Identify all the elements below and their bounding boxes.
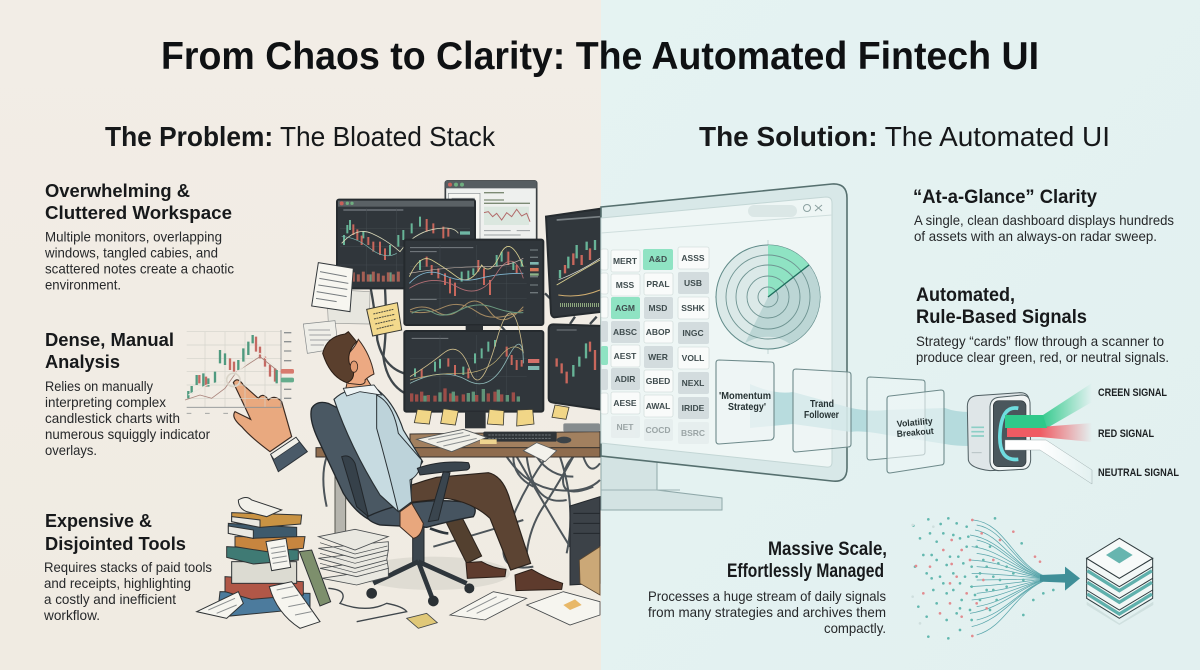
keyboard, mouse and desk papers	[417, 423, 600, 462]
monitor: centre chart with indicators	[404, 240, 543, 331]
ticker tile grid: MERT	[613, 256, 638, 266]
strategy card: trend follower: Trand	[810, 399, 834, 410]
browser window behind monitors	[445, 181, 537, 241]
ticker tile grid: GBED	[646, 376, 670, 386]
monitor stand	[601, 450, 722, 510]
ticker tile grid: BSRC	[681, 428, 705, 438]
text block: at-a-glance clarity	[913, 186, 1174, 244]
strategy card: back	[867, 377, 925, 460]
text block: rule-based signals	[916, 285, 1169, 365]
text block: rule-based signals: Automated,	[916, 285, 1015, 306]
text block: dense manual analysis: Dense, Manual	[45, 329, 174, 350]
floor shadow	[357, 557, 510, 590]
computer tower and box	[570, 497, 600, 595]
panel background: solution side	[601, 0, 1200, 670]
text block: at-a-glance clarity: A single, clean dashboard displays hundreds	[914, 212, 1174, 228]
loose papers pinned to wall	[303, 263, 370, 353]
ticker tile grid: INGC	[682, 328, 704, 338]
heading: the solution: The Solution: The Automated UI	[699, 121, 1110, 152]
arrow	[1040, 567, 1080, 591]
shirt	[334, 387, 423, 512]
strategy card: trend follower: Follower	[804, 410, 839, 421]
ticker tile grid: MSS	[616, 280, 635, 290]
text block: at-a-glance clarity: of assets with an always-on radar sweep.	[914, 228, 1157, 244]
strategy card: momentum	[716, 360, 774, 444]
text block: massive scale	[648, 539, 887, 636]
worker	[323, 332, 563, 591]
floor cable and scattered papers	[328, 588, 600, 628]
ticker tile grid: AWAL	[646, 401, 670, 411]
illustration: cluttered monitor wall	[303, 181, 603, 421]
text block: massive scale: compactly.	[824, 620, 886, 636]
beam roots	[1005, 415, 1047, 428]
signal labels	[1098, 387, 1179, 479]
text block: dense manual analysis: interpreting complex	[45, 394, 166, 410]
arm	[377, 395, 422, 512]
neutral signal beam	[1005, 440, 1092, 484]
dots	[913, 518, 1053, 638]
hair	[323, 332, 357, 383]
data stream funnel	[913, 518, 1080, 638]
book stack	[197, 497, 331, 628]
pointing hand with cuff	[233, 380, 307, 472]
text block: expensive tools: and receipts, highlighting	[44, 575, 191, 591]
ear	[350, 361, 358, 372]
ticker tile grid: SSHK	[681, 303, 706, 313]
office chair	[311, 402, 475, 606]
text block: expensive tools: a costly and inefficient	[44, 591, 176, 607]
text block: dense manual analysis	[45, 329, 210, 458]
text block: expensive tools: Requires stacks of paid tools	[44, 559, 212, 575]
text block: massive scale: Effortlessly Managed	[727, 561, 884, 582]
near leg trousers	[387, 473, 531, 570]
green signal beam	[1005, 383, 1092, 428]
ticker tile grid: COCD	[645, 425, 671, 435]
ticker tile grid: AEST	[614, 351, 637, 361]
text block: dense manual analysis: Relies on manually	[45, 378, 153, 394]
radar sweep	[715, 240, 821, 354]
text block: rule-based signals: Strategy “cards” flow through a scanner to	[916, 333, 1164, 349]
far leg	[447, 510, 482, 563]
ticker tile grid: USB	[684, 278, 702, 288]
text block: expensive tools: Expensive &	[45, 510, 152, 531]
signal labels: RED SIGNAL	[1098, 428, 1154, 440]
chart: candlestick sketch with indicators	[185, 330, 294, 413]
text block: rule-based signals: produce clear green, red, or neutral signals.	[916, 349, 1169, 365]
ticker tile grid: ASSS	[681, 253, 705, 263]
title: From Chaos to Clarity: The Automated Fintech UI	[161, 35, 1039, 78]
signal labels: CREEN SIGNAL	[1098, 387, 1167, 399]
text block: overwhelming workspace: Multiple monitors, overlapping	[45, 228, 222, 244]
signal labels: NEUTRAL SIGNAL	[1098, 467, 1179, 479]
text block: dense manual analysis: overlays.	[45, 442, 97, 458]
illustration: worker, desk and clutter	[197, 332, 600, 628]
strategy card: momentum: Strategy'	[728, 401, 766, 413]
collar	[343, 385, 382, 396]
armrest	[417, 462, 470, 522]
text block: dense manual analysis: numerous squiggly indicator	[45, 426, 210, 442]
text block: dense manual analysis: candlestick charts with	[45, 410, 180, 426]
red signal beam	[1007, 423, 1092, 442]
monitor: top left chart	[337, 200, 475, 288]
shoes	[466, 562, 563, 591]
text block: massive scale: from many strategies and archives them	[648, 604, 886, 620]
sticky notes under monitor	[414, 405, 569, 426]
text block: rule-based signals: Rule-Based Signals	[916, 307, 1087, 328]
text block: overwhelming workspace	[44, 180, 234, 292]
text block: overwhelming workspace: Cluttered Workspace	[45, 202, 232, 223]
strategy card: volatility breakout: Volatility	[896, 416, 933, 429]
text block: overwhelming workspace: environment.	[45, 276, 121, 292]
strategy card: volatility breakout: Breakout	[896, 426, 934, 439]
text block: massive scale: Processes a huge stream of daily signals	[648, 588, 886, 604]
text block: overwhelming workspace: windows, tangled cabies, and	[44, 244, 218, 260]
text block: overwhelming workspace: Overwhelming &	[45, 180, 190, 201]
signal beams	[1005, 383, 1092, 484]
text block: expensive tools	[43, 510, 212, 623]
strategy card: momentum: 'Momentum	[719, 390, 771, 402]
strategy card: trend follower	[793, 369, 851, 452]
ticker tile grid: NET	[616, 422, 634, 432]
signal scanner device	[967, 393, 1031, 471]
ticker tile grid: MSD	[649, 303, 667, 313]
ticker tile grid: PRAL	[646, 279, 670, 289]
ticker tile grid: A&D	[649, 254, 667, 264]
ticker tile grid: AGM	[615, 303, 635, 313]
flow band through strategy cards	[750, 384, 970, 446]
desk	[316, 412, 600, 537]
hand	[400, 503, 423, 538]
text block: massive scale: Massive Scale,	[768, 539, 887, 560]
text block: expensive tools: workflow.	[43, 607, 100, 623]
dashboard monitor	[601, 184, 847, 481]
archive stack icon	[1087, 538, 1153, 625]
monitor: lower centre chart	[404, 313, 543, 421]
ticker tile grid: AESE	[613, 398, 637, 408]
ticker tile grid: ADIR	[615, 374, 635, 384]
neck	[345, 377, 373, 393]
ticker tile grid: WER	[648, 352, 668, 362]
text block: overwhelming workspace: scattered notes create a chaotic	[45, 260, 234, 276]
ticker tile grid: IRIDE	[682, 403, 705, 413]
ticker tile grid: NEXL	[682, 378, 704, 388]
stack of papers	[318, 529, 388, 585]
monitor: lower right, cut by divider	[549, 324, 603, 410]
ticker tile grid: ABOP	[646, 327, 671, 337]
monitor: upper right, cut by divider	[546, 208, 603, 317]
monitor cables	[371, 288, 597, 393]
ticker tile grid: VOLL	[682, 353, 704, 363]
text block: dense manual analysis: Analysis	[45, 351, 120, 372]
ticker tile grid	[601, 247, 709, 444]
sticky note on wall	[367, 303, 402, 336]
heading: the problem: The Problem: The Bloated Stack	[105, 121, 496, 152]
face	[343, 339, 374, 385]
ticker tile grid: ABSC	[613, 327, 637, 337]
panel background: problem side	[0, 0, 601, 670]
text block: expensive tools: Disjointed Tools	[45, 533, 186, 554]
text block: at-a-glance clarity: “At-a-Glance” Clarity	[913, 186, 1097, 208]
converging lines	[970, 520, 1050, 635]
strategy card: volatility breakout	[887, 390, 944, 473]
tangled cables under desk	[323, 447, 600, 568]
